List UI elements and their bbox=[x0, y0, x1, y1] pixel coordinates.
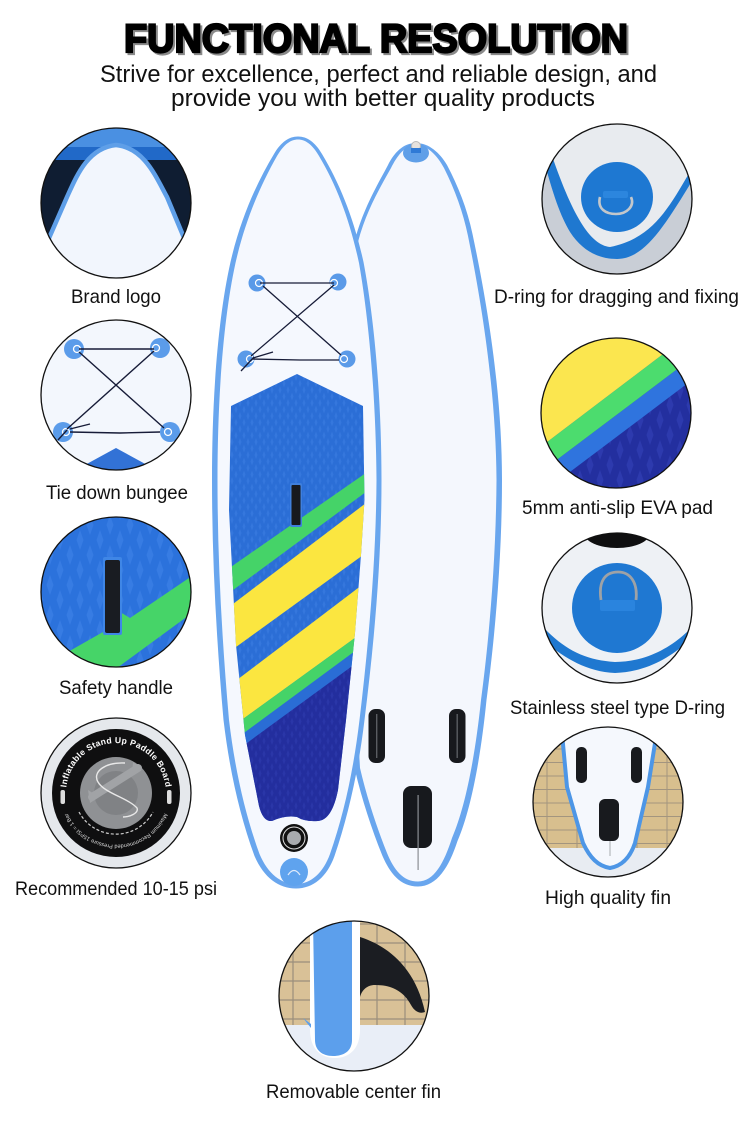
callout: high quality fin bbox=[532, 712, 684, 909]
icon: centre fin box bbox=[403, 786, 432, 870]
icon: air valve bbox=[280, 824, 308, 852]
icon: nose D-ring patch bbox=[403, 142, 429, 162]
image: valve: Maximum Recommended Pressure 15PSI = 1 Bar bbox=[64, 814, 168, 849]
label: Recommended 10-15 psi bbox=[15, 878, 217, 900]
stripe: yellow lower bbox=[239, 588, 358, 719]
image: pad stripes bbox=[542, 338, 690, 488]
subtitle: Strive for excellence, perfect and reliable design, and bbox=[100, 61, 657, 88]
icon: tail D-ring patch bbox=[280, 858, 308, 886]
label: Removable center fin bbox=[266, 1081, 441, 1103]
anti-slip deck pad bbox=[229, 374, 364, 822]
callout: D-ring for dragging bbox=[494, 122, 739, 308]
label: 5mm anti-slip EVA pad bbox=[522, 497, 713, 519]
label: Brand logo bbox=[71, 286, 161, 308]
icon: bungee tie down bbox=[238, 274, 356, 371]
image: D-ring on nose bbox=[540, 122, 694, 276]
image: fin side view bbox=[278, 920, 430, 1072]
callout: anti-slip EVA pad bbox=[522, 320, 713, 519]
icon: deck carry handle bbox=[290, 483, 302, 527]
callout: safety handle bbox=[40, 516, 192, 699]
stripe: green lower bbox=[243, 638, 354, 732]
image: valve bbox=[42, 718, 190, 868]
stripe: green top bbox=[232, 474, 364, 590]
image: handle on deck pad bbox=[40, 516, 192, 668]
callout: recommended pressure bbox=[15, 717, 217, 900]
label: High quality fin bbox=[545, 887, 671, 909]
title: FUNCTIONAL RESOLUTION bbox=[124, 17, 628, 61]
callout: brand logo bbox=[40, 125, 192, 308]
front view of paddle board bbox=[212, 136, 382, 888]
icon: right side fin box bbox=[449, 709, 466, 763]
navy tail area bbox=[246, 666, 352, 822]
callout: tie down bungee bbox=[40, 319, 192, 504]
back view of paddle board bbox=[340, 142, 502, 886]
image: valve: Inflatable Stand Up Paddle Board bbox=[60, 737, 172, 787]
label: D-ring for dragging and fixing bbox=[494, 286, 739, 308]
subtitle bbox=[100, 61, 657, 112]
image: board nose bbox=[42, 128, 190, 278]
callout: stainless steel D-ring bbox=[510, 518, 725, 719]
image: board tail with fins bbox=[534, 728, 682, 876]
label: Safety handle bbox=[59, 677, 173, 699]
stripe: blue lower bbox=[244, 652, 353, 743]
stripe: yellow top bbox=[234, 504, 364, 647]
subtitle: provide you with better quality products bbox=[171, 85, 595, 112]
image: bungee cords bbox=[40, 319, 192, 472]
label: Tie down bungee bbox=[46, 482, 188, 504]
icon: left side fin box bbox=[368, 709, 385, 763]
image: D-ring on tail bbox=[542, 534, 692, 682]
callout: removable center fin bbox=[266, 920, 441, 1103]
label: Stainless steel type D-ring bbox=[510, 697, 725, 719]
